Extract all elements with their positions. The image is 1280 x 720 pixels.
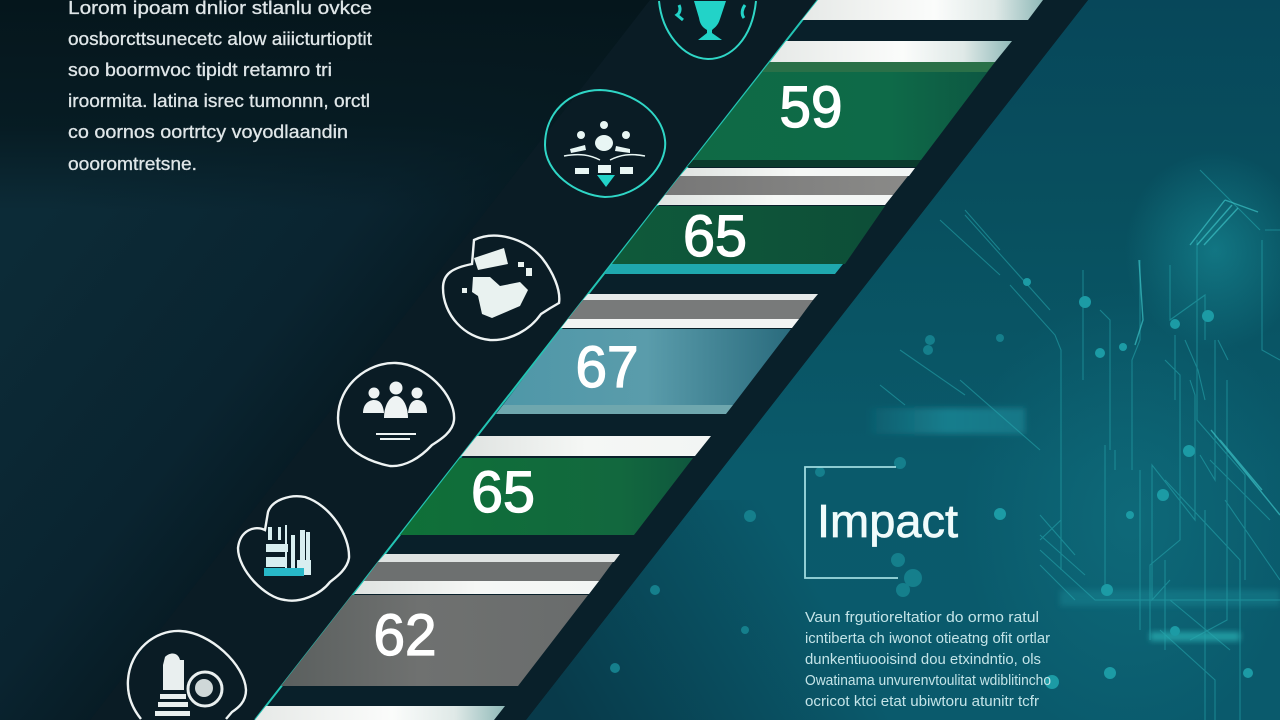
- text block: intro paragraph: iroormita. latina isrec tumonnn, orctl: [68, 91, 370, 111]
- bar: value 65 upper: [604, 204, 885, 274]
- bar: value 65 upper: 65: [683, 204, 747, 269]
- accent: teal band edge: [255, 0, 818, 720]
- text block: intro paragraph: co oornos oortrtcy voyodlaandin: [68, 122, 348, 142]
- bar: value 65 lower: 65: [471, 460, 535, 525]
- text block: intro paragraph: soo boormvoc tipidt retamro tri: [68, 60, 332, 80]
- bar: value 62: 62: [374, 603, 436, 668]
- bar: bottom white strip: [255, 706, 505, 720]
- circuit traces: [880, 170, 1280, 720]
- bar: value 65 lower: [400, 458, 693, 535]
- panel: left dark background: [0, 0, 760, 720]
- icon: handshake: [443, 236, 559, 340]
- panel: right teal circuit background: [500, 0, 1280, 720]
- bar: value 59: [687, 62, 995, 167]
- bar: white and gray strips above 65: [657, 168, 915, 205]
- bar: white strip above lower 65: [461, 436, 711, 456]
- text block: intro paragraph: oooromtretsne.: [68, 154, 197, 174]
- bar: white and gray strips above 62: [354, 554, 620, 594]
- icon: stopwatch and bottle: [128, 631, 246, 719]
- bar: value 67: 67: [576, 335, 638, 400]
- bar: top white strip: [802, 0, 1043, 20]
- bar: value 62: [281, 595, 588, 686]
- panel: diagonal bar band: [255, 0, 1088, 720]
- heading: Impact: Impact: [817, 495, 958, 547]
- text block: intro paragraph: oosborcttsunecetc alow aiiicturtioptit: [68, 29, 372, 49]
- circuit nodes: [994, 278, 1253, 689]
- bar: white and gray strips above 67: [561, 294, 818, 328]
- panel: diagonal icon band: [90, 0, 818, 720]
- icon: city skyline chart: [238, 496, 349, 601]
- text block: impact paragraph: ocricot ktci etat ubiwtoru atunitr tcfr: [805, 694, 1039, 710]
- icon: balance and shield: [545, 90, 665, 197]
- bar: value 59: 59: [780, 75, 842, 140]
- heading: Impact: [805, 467, 958, 578]
- text block: impact paragraph: Vaun frgutioreltatior do ormo ratul: [805, 610, 1039, 626]
- text block: impact paragraph: Owatinama unvurenvtoulitat wdiblitincho: [805, 673, 1051, 689]
- text block: impact paragraph: [805, 610, 1051, 710]
- icon: trophy: [659, 1, 756, 59]
- bar: white strip above 59: [770, 41, 1012, 62]
- bar stack: [255, 0, 1043, 720]
- icon: people group: [338, 363, 454, 466]
- text block: intro paragraph: [68, 0, 372, 174]
- text block: impact paragraph: dunkentiuooisind dou etxindntio, ols: [805, 652, 1041, 668]
- bar: value 67: [496, 329, 791, 414]
- text block: impact paragraph: icntiberta ch iwonot otieatng ofit ortlar: [805, 631, 1050, 647]
